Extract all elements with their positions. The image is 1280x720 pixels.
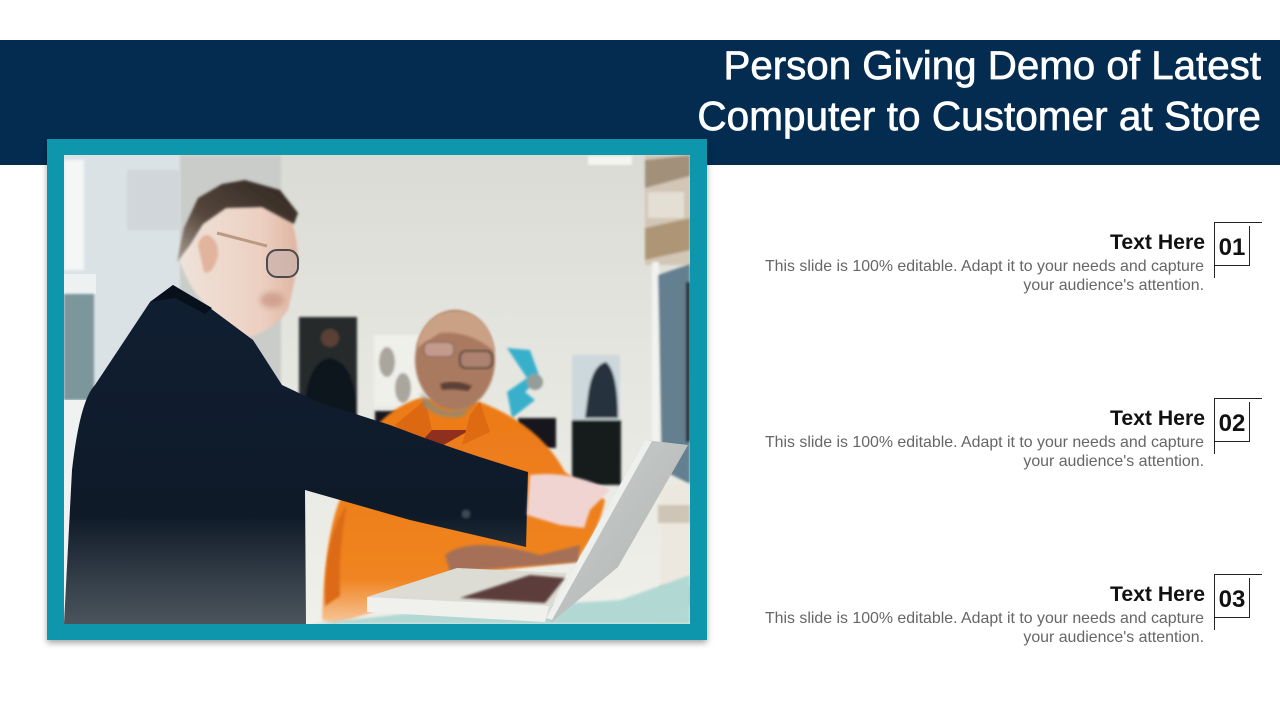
title: Person Giving Demo of Latest <box>723 43 1261 88</box>
item 03 description: This slide is 100% editable. Adapt it to your needs and capture your audience's attention. <box>765 610 1204 646</box>
item 01 number badge: 01 <box>1219 234 1245 261</box>
list item 01 <box>765 222 1262 294</box>
item 01 description: This slide is 100% editable. Adapt it to your needs and capture your audience's attention. <box>765 258 1204 294</box>
item 03 number badge: 03 <box>1219 586 1245 613</box>
room background <box>64 155 690 624</box>
title: Computer to Customer at Store <box>697 93 1261 139</box>
item 02 number badge: 02 <box>1219 410 1245 437</box>
item 02 heading: Text Here <box>1110 407 1205 430</box>
customer in orange shirt <box>322 310 605 624</box>
photo: salesperson showing a laptop to a customer <box>64 155 690 624</box>
salesperson in dark jacket <box>64 180 610 624</box>
item 03 heading: Text Here <box>1110 583 1205 606</box>
laptop <box>310 440 690 624</box>
item 01 heading: Text Here <box>1110 231 1205 254</box>
item 02 description: This slide is 100% editable. Adapt it to your needs and capture your audience's attention. <box>765 434 1204 470</box>
list item 03 <box>765 574 1262 646</box>
stone wall and monitor <box>645 155 690 624</box>
title <box>697 43 1261 139</box>
header band <box>0 40 1280 165</box>
list item 02 <box>765 398 1262 470</box>
photo frame <box>47 139 707 640</box>
wall posters <box>299 317 621 485</box>
